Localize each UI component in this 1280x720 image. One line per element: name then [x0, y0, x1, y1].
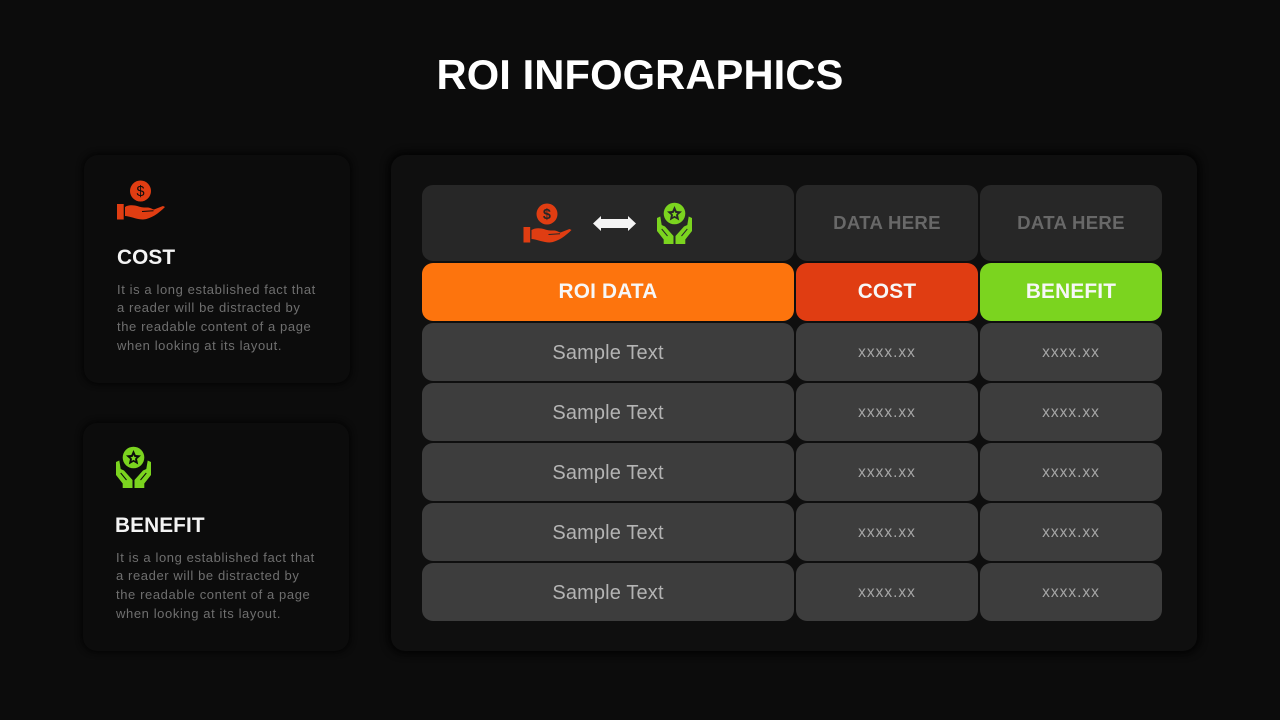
- text: benefit description: the readable content of a page: [116, 587, 310, 602]
- header cell: data 2: [980, 185, 1162, 261]
- row 1 benefit: xxxx.xx: [1042, 344, 1100, 361]
- row 4 cost: [796, 503, 978, 561]
- text: benefit description: a reader will be distracted by: [116, 568, 299, 583]
- row 5 benefit: xxxx.xx: [1042, 584, 1100, 601]
- row 3 cost: xxxx.xx: [858, 464, 916, 481]
- arrow: double-headed: [593, 216, 636, 231]
- panel: ROI table background: [391, 155, 1197, 651]
- column head: cost: COST: [858, 280, 916, 303]
- title: ROI INFOGRAPHICS: [437, 51, 843, 98]
- row 4 cost: xxxx.xx: [858, 524, 916, 541]
- row 4 benefit: xxxx.xx: [1042, 524, 1100, 541]
- header cell: data 1: [796, 185, 978, 261]
- row 2 cost: xxxx.xx: [858, 404, 916, 421]
- column head: ROI data: [422, 263, 794, 321]
- icon: cost hand: $: [543, 207, 551, 223]
- row 3 cost: [796, 443, 978, 501]
- icon: hands holding star: [116, 446, 151, 488]
- text: benefit description: when looking at its layout.: [116, 606, 281, 621]
- text: cost description: a reader will be distracted by: [117, 300, 300, 315]
- row 2 label: Sample Text: [552, 402, 664, 424]
- row 4 benefit: [980, 503, 1162, 561]
- header cell: data 2: DATA HERE: [1017, 212, 1125, 233]
- column head: cost: [796, 263, 978, 321]
- row 2 benefit: xxxx.xx: [1042, 404, 1100, 421]
- text: cost description: It is a long established fact that: [117, 282, 316, 296]
- row 3 benefit: xxxx.xx: [1042, 464, 1100, 481]
- row 3 benefit: [980, 443, 1162, 501]
- icon: hand holding coin: [117, 180, 165, 220]
- text: cost description: the readable content of a page: [117, 319, 311, 334]
- column head: benefit: [980, 263, 1162, 321]
- row 1 cost: xxxx.xx: [858, 344, 916, 361]
- row 4 label: Sample Text: [552, 522, 664, 544]
- row 4 label: [422, 503, 794, 561]
- row 5 label: [422, 563, 794, 621]
- icon: benefit hands: [657, 202, 692, 244]
- row 3 label: Sample Text: [552, 462, 664, 484]
- row 3 label: [422, 443, 794, 501]
- row 5 cost: [796, 563, 978, 621]
- panel: benefit: [83, 423, 349, 651]
- row 1 cost: [796, 323, 978, 381]
- text: benefit description: [116, 550, 315, 621]
- row 1 label: [422, 323, 794, 381]
- text: cost description: [117, 282, 316, 353]
- header cell: data 1: DATA HERE: [833, 212, 941, 233]
- icon: hand holding coin: $: [136, 184, 145, 200]
- heading: benefit: BENEFIT: [115, 514, 205, 537]
- panel: cost: [84, 155, 350, 383]
- icon: cost hand: [524, 204, 572, 242]
- row 5 label: Sample Text: [552, 582, 664, 604]
- row 2 label: [422, 383, 794, 441]
- header cell: icons: [422, 185, 794, 261]
- row 1 label: Sample Text: [552, 342, 664, 364]
- row 5 cost: xxxx.xx: [858, 584, 916, 601]
- heading: cost: COST: [117, 246, 175, 269]
- text: benefit description: It is a long established fact that: [116, 550, 315, 564]
- text: cost description: when looking at its layout.: [117, 338, 282, 353]
- table: ROI data: [422, 185, 1162, 621]
- row 5 benefit: [980, 563, 1162, 621]
- column head: ROI data: ROI DATA: [558, 280, 658, 303]
- row 2 benefit: [980, 383, 1162, 441]
- row 2 cost: [796, 383, 978, 441]
- column head: benefit: BENEFIT: [1026, 280, 1116, 303]
- row 1 benefit: [980, 323, 1162, 381]
